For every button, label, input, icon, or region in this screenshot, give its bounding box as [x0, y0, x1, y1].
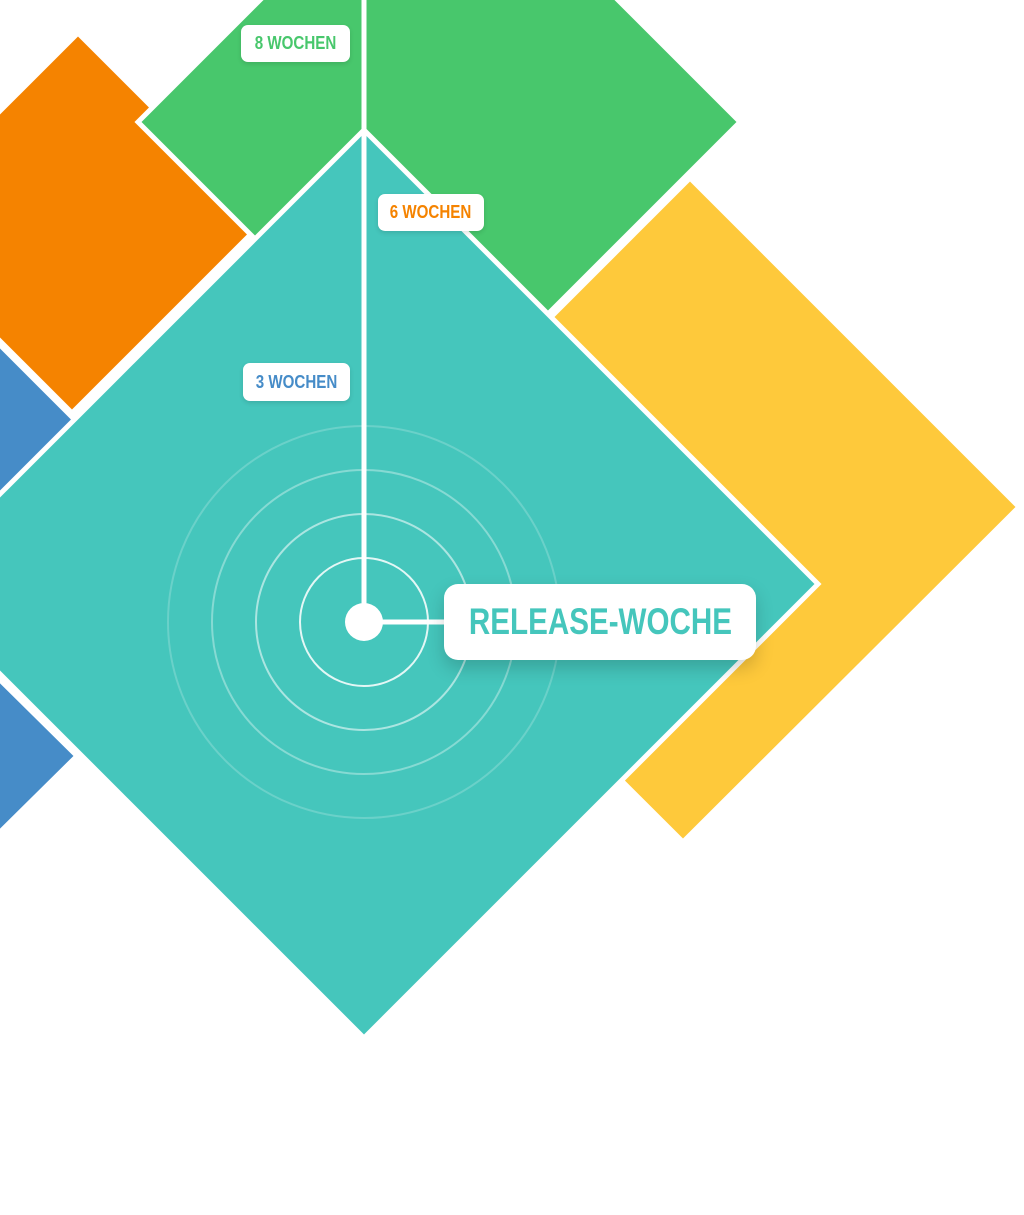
label: release week — [444, 584, 756, 660]
shape: blue rectangle lower — [0, 670, 77, 842]
label: release week: RELEASE-WOCHE — [468, 601, 732, 642]
label: 8 weeks: 8 WOCHEN — [255, 33, 336, 53]
label: 3 weeks: 3 WOCHEN — [256, 372, 337, 392]
label: 8 weeks — [241, 25, 350, 62]
label: 3 weeks — [243, 363, 350, 401]
label: 6 weeks: 6 WOCHEN — [390, 202, 472, 222]
rings around release point — [168, 426, 560, 818]
shape: orange rectangle — [0, 33, 265, 413]
connector to release label — [364, 620, 450, 624]
shape: yellow rectangle — [354, 178, 1019, 842]
label: 6 weeks — [378, 194, 484, 231]
shape: green diamond — [138, 0, 740, 423]
shape: teal diamond — [0, 130, 818, 1038]
shape: blue rectangle upper — [0, 335, 75, 505]
release point dot — [345, 603, 383, 641]
timeline line — [362, 0, 366, 622]
